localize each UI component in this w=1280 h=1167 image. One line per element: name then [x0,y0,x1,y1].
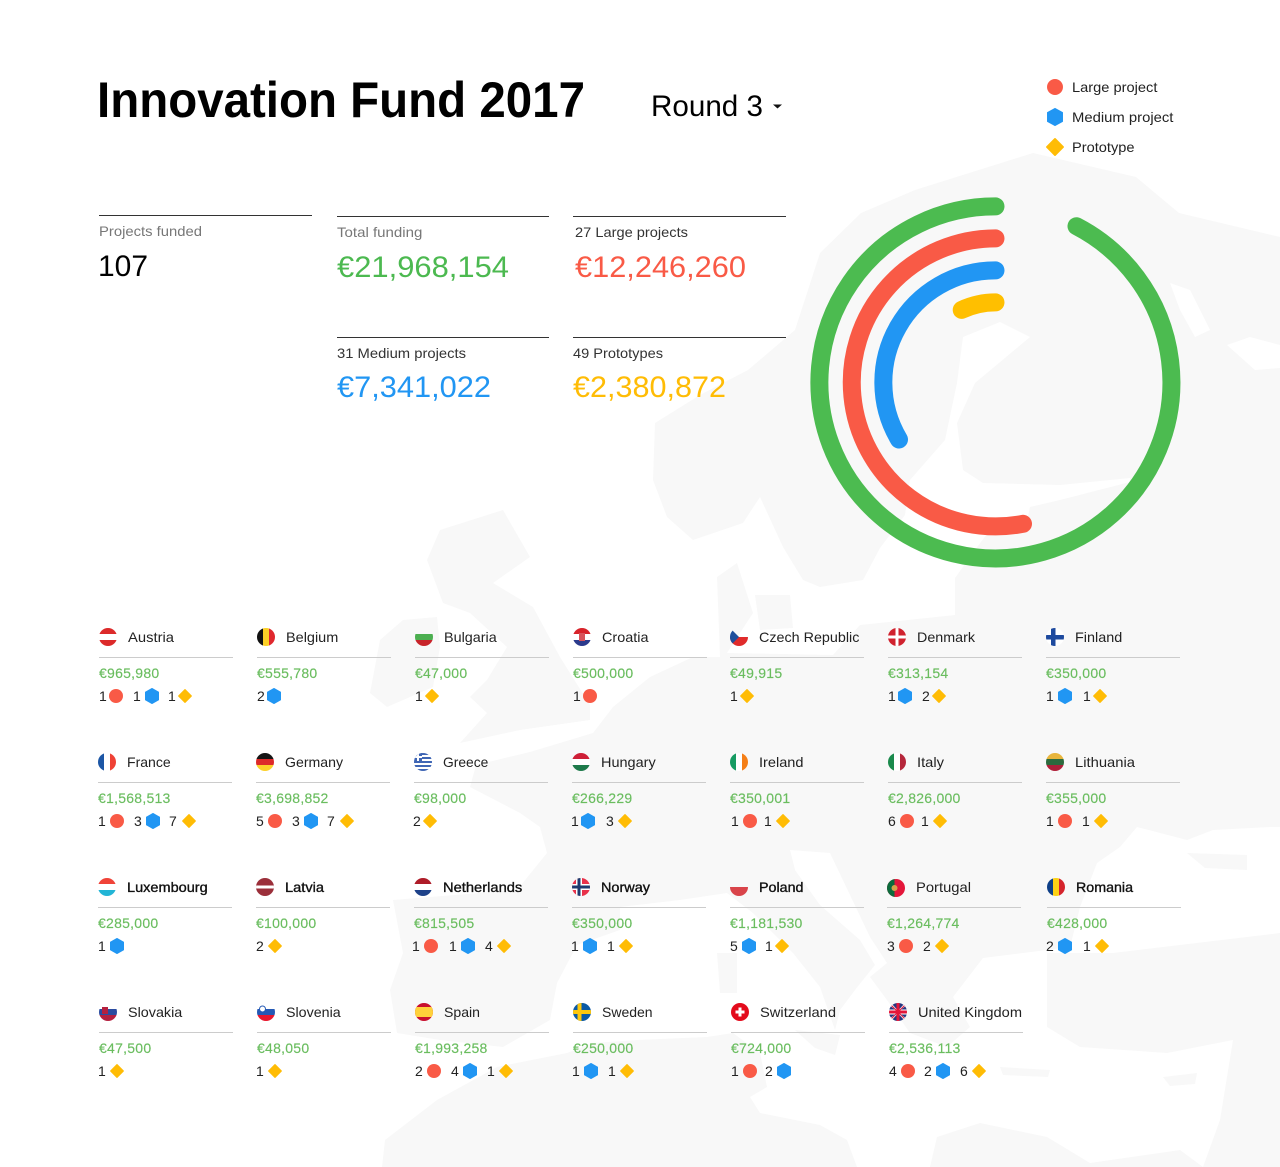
flag: Switzerland [731,1003,749,1021]
card: Italy: 6 [888,813,896,829]
flag: Latvia [256,878,274,896]
card: Norway: Norway [601,879,650,895]
card: Romania: €428,000 [1047,915,1107,931]
card: Croatia: €500,000 [573,665,633,681]
card: Slovakia: €47,500 [99,1040,151,1056]
card: Spain: 4 [451,1063,459,1079]
card: Luxembourg [98,878,232,954]
card: Finland: 1 [1083,688,1091,704]
card: Netherlands [412,878,548,954]
card: Greece: Greece [443,754,488,770]
card: Portugal: €1,264,774 [887,915,960,931]
round selector: Round 3 [651,90,763,123]
card: Portugal: 2 [923,938,931,954]
card: Switzerland: 1 [731,1063,739,1079]
card: Austria: Austria [128,629,174,645]
card: Portugal: 3 [887,938,895,954]
card: Hungary: €266,229 [572,790,632,806]
stat: prototypes: €2,380,872 [573,371,726,404]
card: Sweden [572,1003,707,1079]
card: Spain: 1 [487,1063,495,1079]
card: Hungary: 1 [571,813,579,829]
card: Netherlands: 1 [412,938,420,954]
card: Bulgaria: 1 [415,688,423,704]
card: Luxembourg: €285,000 [98,915,158,931]
stat: prototypes [573,338,786,404]
card: Slovenia: €48,050 [257,1040,309,1056]
flag: Czech Republic [730,630,748,646]
card: Germany: 3 [292,813,300,829]
flag: Croatia [573,628,591,646]
card: Croatia: Croatia [602,629,649,645]
flag: Romania [1047,878,1065,896]
card: Switzerland: Switzerland [760,1004,836,1020]
arc: medium projects [883,270,996,440]
stat: total funding: €21,968,154 [337,251,509,284]
card: United Kingdom: €2,536,113 [889,1040,961,1056]
card: Finland: 1 [1046,688,1054,704]
card: Netherlands: 4 [485,938,493,954]
card: Belgium: €555,780 [257,665,317,681]
card: Ireland: 1 [731,813,739,829]
flag: Denmark [888,628,906,646]
flag: Spain [415,1003,433,1021]
card: Finland [1046,628,1180,704]
card: Bulgaria: Bulgaria [444,629,497,645]
card: Switzerland: €724,000 [731,1040,791,1056]
arc: prototypes [962,302,996,310]
flag: Belgium [257,628,275,646]
card: Italy [888,753,1022,829]
card: United Kingdom: 4 [889,1063,897,1079]
card: Hungary: 3 [606,813,614,829]
card: France: 1 [98,813,106,829]
card: Romania [1046,878,1181,954]
card: France: 3 [134,813,142,829]
card: Belgium [257,628,391,704]
card: Belgium: 2 [257,688,265,704]
card: United Kingdom: United Kingdom [918,1004,1022,1020]
card: Poland [730,879,864,954]
card: United Kingdom: 6 [960,1063,968,1079]
stat: total funding [337,216,549,284]
card: Romania: Romania [1076,879,1133,895]
legend: prototype: Prototype [1072,139,1135,155]
stat: large projects [573,216,786,284]
flag: Germany [256,753,274,771]
card: Denmark [888,628,1022,704]
stat: medium projects [337,338,549,404]
card: Czech Republic: Czech Republic [759,629,859,645]
legend: large project: Large project [1072,79,1158,95]
flag: Ireland [730,753,748,771]
card: Spain: 2 [415,1063,423,1079]
card: Netherlands: €815,505 [414,915,474,931]
flag: Austria [99,628,117,646]
title: Innovation Fund 2017 [97,72,585,128]
legend [1047,79,1174,155]
card: Lithuania: 1 [1082,813,1090,829]
card: Poland: 1 [765,938,773,954]
card: Ireland: 1 [764,813,772,829]
card: Poland: Poland [759,879,804,895]
card: Finland: Finland [1075,629,1122,645]
card: United Kingdom [889,1003,1023,1079]
card: Slovakia: Slovakia [128,1004,183,1020]
card: Austria [99,628,233,704]
stat: total funding: Total funding [337,224,422,240]
card: Denmark: 2 [922,688,930,704]
card: Luxembourg: Luxembourg [127,879,208,895]
card: Austria: 1 [168,688,176,704]
flag: Poland [730,887,748,896]
card: Croatia [573,628,707,704]
card: Spain: Spain [444,1004,480,1020]
card: Switzerland [731,1003,865,1079]
card: Czech Republic [730,628,864,704]
card: Netherlands: 1 [449,938,457,954]
flag: Greece [414,753,432,771]
stat: projects funded [98,216,312,283]
card: Germany: €3,698,852 [256,790,329,806]
card: Norway [571,878,706,954]
card: Germany: 7 [327,813,335,829]
card: Poland: €1,181,530 [730,915,803,931]
card: Romania: 2 [1046,938,1054,954]
background map of Europe [370,153,1280,1167]
card: Germany: Germany [285,754,343,770]
card: Germany: 5 [256,813,264,829]
flag: Lithuania [1046,753,1064,771]
card: Bulgaria [415,629,549,704]
card: Slovenia: Slovenia [286,1004,341,1020]
card: Latvia: Latvia [285,879,324,895]
flag: Slovenia [257,1003,275,1021]
card: Romania: 1 [1083,938,1091,954]
card: Ireland: Ireland [759,754,804,770]
card: Poland: 5 [730,938,738,954]
card: Latvia: €100,000 [256,915,316,931]
card: Greece: 2 [413,813,421,829]
flag: Norway [572,878,590,896]
card: France: France [127,754,171,770]
card: Spain [415,1003,549,1079]
card: United Kingdom: 2 [924,1063,932,1079]
stat: prototypes: 49 Prototypes [573,345,663,361]
legend: medium project: Medium project [1072,109,1174,125]
card: Slovakia: 1 [98,1063,106,1079]
flag: Bulgaria [415,634,433,646]
card: Latvia: 2 [256,938,264,954]
flag: Slovakia [99,1007,117,1021]
card: Denmark: Denmark [917,629,976,645]
flag: Hungary [572,753,590,771]
card: France [98,753,232,829]
flag: United Kingdom [889,1003,907,1021]
card: Czech Republic: 1 [730,688,738,704]
card: Italy: €2,826,000 [888,790,961,806]
radial bar chart [819,206,1171,558]
card: Portugal [887,879,1021,954]
card: Hungary: Hungary [601,754,656,770]
flag: Netherlands [414,878,432,896]
card: Austria: 1 [99,688,107,704]
flag: France [98,753,116,771]
card: Slovenia [256,1003,391,1079]
card: Spain: €1,993,258 [415,1040,488,1056]
card: Latvia [256,878,390,954]
flag: Finland [1046,628,1064,646]
arc: total funding [819,206,1171,558]
arc: large projects [852,238,1023,526]
card: Italy: 1 [921,813,929,829]
stat: projects funded: Projects funded [99,223,202,239]
card: Czech Republic: €49,915 [730,665,782,681]
card: Lithuania: 1 [1046,813,1054,829]
flag: Luxembourg [98,878,116,896]
card: Denmark: €313,154 [888,665,948,681]
card: Slovakia [98,1004,233,1079]
map inland seas [1170,283,1280,370]
card: Denmark: 1 [888,688,896,704]
stat: medium projects: 31 Medium projects [337,345,466,361]
card: Lithuania: Lithuania [1075,754,1135,770]
card: Germany [256,753,390,829]
card: Slovenia: 1 [256,1063,264,1079]
card: Switzerland: 2 [765,1063,773,1079]
card: Greece: €98,000 [414,790,466,806]
card: Sweden: 1 [572,1063,580,1079]
card: Austria: 1 [133,688,141,704]
stat: projects funded: 107 [98,250,148,283]
card: Lithuania [1046,753,1180,829]
stat: large projects: €12,246,260 [575,251,746,284]
flag: Sweden [573,1003,591,1021]
card: Greece [413,753,548,829]
card: Ireland: €350,001 [730,790,790,806]
flag: Portugal [887,879,905,897]
card: Sweden: €250,000 [573,1040,633,1056]
card: Bulgaria: €47,000 [415,665,467,681]
card: Norway: 1 [607,938,615,954]
card: Norway: 1 [571,938,579,954]
card: Croatia: 1 [573,688,581,704]
card: France: €1,568,513 [98,790,171,806]
card: Norway: €350,000 [572,915,632,931]
card: Netherlands: Netherlands [443,879,522,895]
card: Belgium: Belgium [286,629,338,645]
card: Ireland [730,753,864,829]
card: Luxembourg: 1 [98,938,106,954]
card: Finland: €350,000 [1046,665,1106,681]
stat: large projects: 27 Large projects [575,224,688,240]
card: Hungary [571,753,706,829]
stat: medium projects: €7,341,022 [337,371,491,404]
card: Lithuania: €355,000 [1046,790,1106,806]
card: Austria: €965,980 [99,665,159,681]
card: Italy: Italy [917,754,944,770]
card: France: 7 [169,813,177,829]
card: Sweden: Sweden [602,1004,653,1020]
card: Portugal: Portugal [916,879,971,895]
flag: Italy [888,753,906,771]
card: Sweden: 1 [608,1063,616,1079]
